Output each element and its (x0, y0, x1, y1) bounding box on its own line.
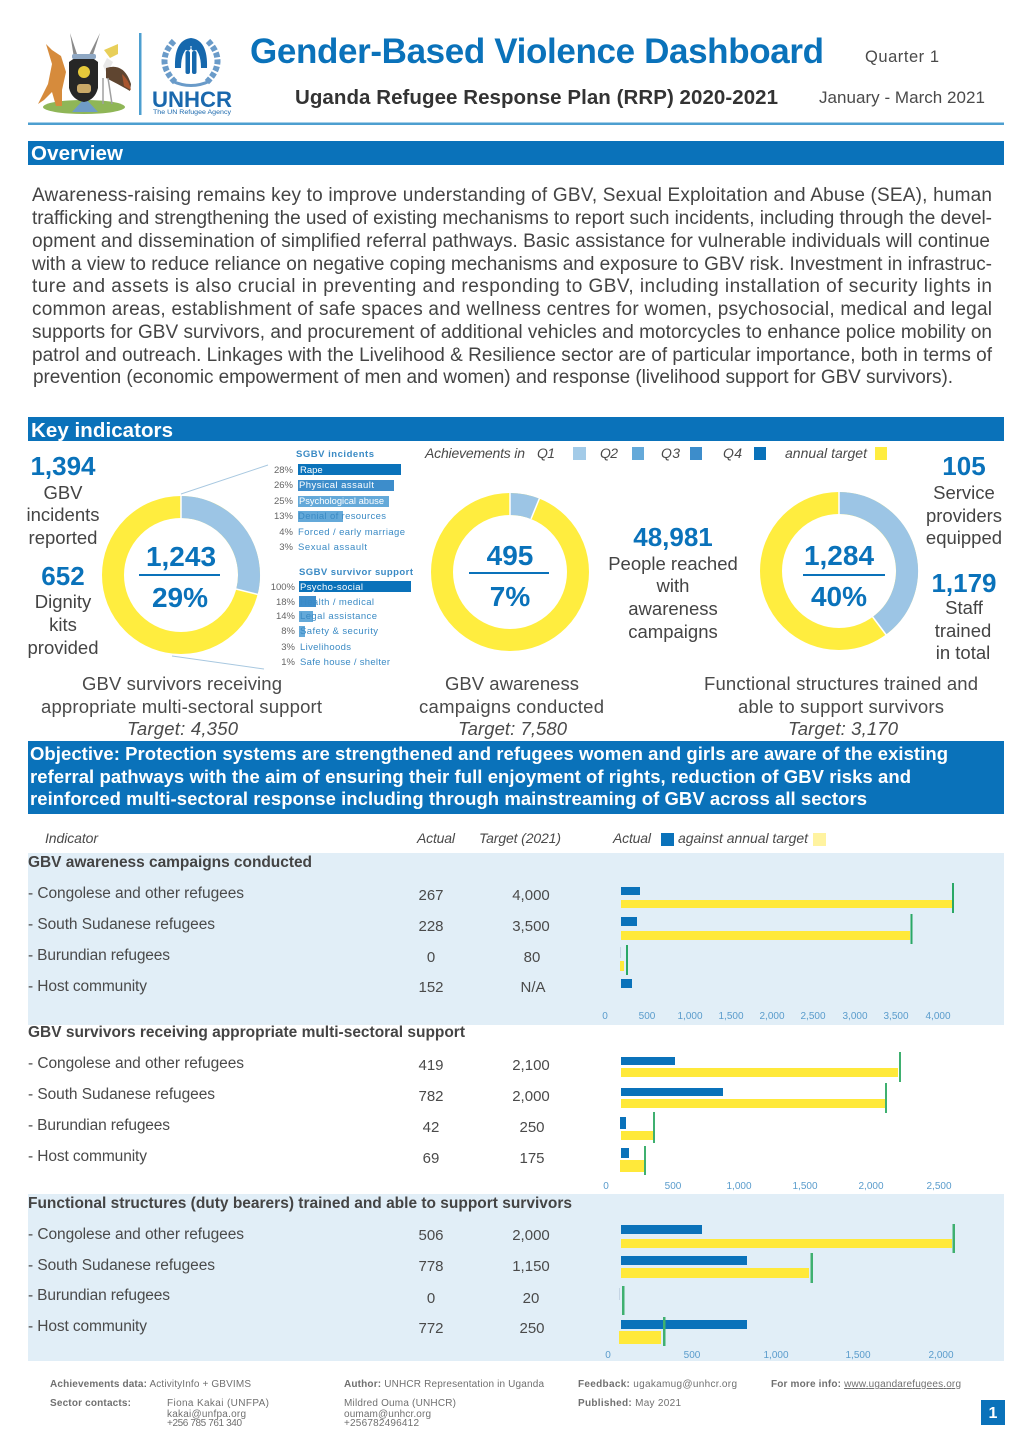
title: Gender-Based Violence Dashboard (250, 32, 824, 71)
panel: key indicators (26, 417, 1004, 739)
footer: author: Author: UNHCR Representation in Uganda (344, 1379, 544, 1390)
bar chart: SGBV incidents: 25% (274, 496, 294, 507)
footer: published: Published: May 2021 (578, 1398, 681, 1409)
bar chart: SGBV incidents: Rape (300, 465, 323, 476)
table header: Target (2021) (479, 830, 561, 846)
stat: staff trained: in total (936, 642, 990, 663)
donut chart: awareness campaigns: 495 (487, 540, 533, 571)
bar chart: SGBV incidents: 4% (279, 527, 294, 538)
footer: more info: For more info: www.ugandarefugees.org (771, 1379, 961, 1390)
stat: dignity kits provided: provided (28, 637, 98, 658)
caption: GBV survivors: appropriate multi-sectoral support (41, 696, 322, 717)
footer: contact UNFPA: kakai@unfpa.org (167, 1409, 246, 1420)
bar chart: SGBV incidents: SGBV incidents (296, 449, 374, 460)
table rows: 80 (524, 949, 540, 966)
footer: contact UNHCR: +256782496412 (344, 1418, 419, 1429)
table header (45, 830, 826, 846)
bar chart: SGBV incidents: Psychological abuse (299, 496, 384, 507)
table rows (28, 1055, 550, 1167)
table header: Actual (416, 830, 456, 846)
bar chart: survivors support: 500 (665, 1181, 682, 1192)
table rows: - Burundian refugees (28, 947, 170, 964)
overview heading: Overview (31, 142, 123, 165)
overview text: ture and assets is also crucial in preventing and responding to GBV, including installation of security lights in (32, 276, 992, 297)
table rows: - Burundian refugees (28, 1287, 170, 1304)
objective banner: reinforced multi-sectoral response including through mainstreaming of GBV across all sectors (30, 788, 867, 809)
legend: achievements by quarter (424, 445, 887, 461)
bar chart: SGBV incidents: 28% (274, 465, 294, 476)
stat: GBV incidents reported: reported (29, 527, 97, 548)
table rows: 0 (427, 1290, 435, 1307)
table rows: 250 (519, 1119, 545, 1136)
stat: people reached: with (656, 575, 689, 596)
bar chart: awareness campaigns: 2,000 (759, 1011, 785, 1022)
table rows: 772 (418, 1320, 444, 1337)
bar chart: awareness campaigns: 3,000 (842, 1011, 868, 1022)
table rows (28, 1226, 550, 1337)
table rows: - South Sudanese refugees (28, 1257, 215, 1274)
logo divider (139, 33, 142, 115)
legend: achievements by quarter: Achievements in (424, 445, 525, 461)
table rows (28, 885, 550, 996)
legend: achievements by quarter: annual target (785, 445, 868, 461)
table rows: - Host community (28, 1318, 147, 1335)
caption: functional structures: Functional structures trained and (704, 673, 978, 694)
table rows: - Congolese and other refugees (28, 1226, 244, 1243)
footer: contact UNHCR: oumam@unhcr.org (344, 1409, 431, 1420)
bar chart: SGBV survivor support: Legal assistance (300, 611, 377, 622)
panel: functional structures table: Functional structures (duty bearers) trained and able to support survivors (28, 1195, 572, 1212)
table rows: - South Sudanese refugees (28, 1086, 215, 1103)
overview heading (28, 141, 1004, 165)
table rows: - South Sudanese refugees (28, 916, 215, 933)
page number: 1 (989, 1405, 998, 1422)
stat: GBV incidents reported: GBV (43, 482, 83, 503)
table rows: - Burundian refugees (28, 1117, 170, 1134)
table rows: 175 (519, 1150, 545, 1167)
overview text: with a view to reduce reliance on negative coping mechanisms and exposure to GBV risk. Investment in infrastruc- (31, 254, 992, 275)
overview text: opment and dissemination of simplified referral pathways. Basic assistance for vulnerable individuals will continue (32, 231, 990, 252)
overview text (31, 185, 993, 388)
stat: GBV incidents reported (26, 451, 100, 548)
caption: awareness campaigns: Target: 7,580 (458, 718, 568, 739)
bar chart: functional structures: 1,000 (763, 1350, 789, 1361)
icon: UNHCR logo: The UN Refugee Agency (153, 110, 231, 116)
bar chart: awareness campaigns: 500 (639, 1011, 656, 1022)
bar chart: awareness campaigns: 3,500 (883, 1011, 909, 1022)
bar chart: SGBV survivor support: 100% (271, 582, 296, 593)
panel: overview (28, 141, 1004, 388)
key indicators heading: Key indicators (31, 419, 173, 442)
bar chart: survivors support (603, 1052, 952, 1192)
donut chart: GBV survivors: 1,243 (146, 541, 216, 572)
table rows: 0 (427, 949, 435, 966)
bar chart: SGBV incidents: 13% (274, 511, 294, 522)
panel: functional structures table (28, 1194, 1004, 1361)
table rows: 152 (418, 979, 444, 996)
panel: survivors support table (28, 1024, 952, 1192)
table rows: 506 (418, 1227, 444, 1244)
table rows: 419 (418, 1057, 444, 1074)
table rows: 2,000 (512, 1088, 550, 1105)
stat: people reached (608, 522, 738, 642)
bar chart: functional structures: 0 (605, 1350, 611, 1361)
footer: contact UNFPA: Fiona Kakai (UNFPA) (167, 1398, 269, 1409)
bar chart: SGBV survivor support: Psycho-social (300, 582, 363, 593)
stat: staff trained (931, 568, 997, 663)
bar chart: functional structures: 500 (684, 1350, 701, 1361)
bar chart: awareness campaigns: 1,500 (718, 1011, 744, 1022)
table rows: 2,100 (512, 1057, 550, 1074)
bar chart: SGBV survivor support: 8% (281, 626, 296, 637)
overview text: trafficking and strengthening the used of existing mechanisms to report such incidents, including through the devel- (32, 208, 992, 229)
table header: Actual (612, 830, 652, 846)
stat: service providers equipped: Service (933, 482, 995, 503)
table rows: - Host community (28, 978, 147, 995)
bar chart: awareness campaigns: 4,000 (925, 1011, 951, 1022)
stat: dignity kits provided (28, 561, 98, 658)
bar chart: survivors support: 2,000 (858, 1181, 884, 1192)
icon: UNHCR logo (152, 38, 232, 116)
stat: people reached: 48,981 (633, 522, 713, 552)
footer: contact UNFPA: +256 785 761 340 (167, 1418, 242, 1429)
donut chart: functional structures (771, 491, 907, 639)
stat: dignity kits provided: Dignity (35, 591, 92, 612)
stat: staff trained: trained (935, 620, 991, 641)
table rows: 20 (523, 1290, 539, 1307)
stat: service providers equipped: 105 (942, 451, 986, 481)
overview text: prevention (economic empowerment of men and women) and response (livelihood support for GBV survivors). (33, 367, 953, 388)
footer: contact UNHCR: Mildred Ouma (UNHCR) (344, 1398, 456, 1409)
icon: UNHCR logo: UNHCR (152, 87, 232, 112)
bar chart: SGBV survivor support: 18% (276, 597, 296, 608)
donut chart: GBV survivors: 29% (152, 582, 208, 613)
objective banner (28, 741, 1004, 814)
table rows: 782 (418, 1088, 444, 1105)
table rows: 69 (423, 1150, 439, 1167)
caption: functional structures (704, 673, 978, 739)
bar chart: SGBV survivor support: Safety & security (300, 626, 378, 637)
footer: data source: Achievements data: ActivityInfo + GBVIMS (50, 1379, 251, 1390)
bar chart: SGBV survivor support: SGBV survivor support (299, 567, 414, 578)
overview text: common areas, establishment of safe spaces and wellness centres for women, psychosocial, medical and legal (32, 299, 992, 320)
overview text: patrol and outreach. Linkages with the Livelihood & Resilience sector are of particular importance, both in terms of (32, 345, 993, 366)
stat: staff trained: Staff (945, 597, 984, 618)
stat: dignity kits provided: kits (49, 614, 77, 635)
bar chart: survivors support: 1,500 (792, 1181, 818, 1192)
panel: awareness campaigns table: GBV awareness campaigns conducted (28, 854, 312, 871)
icon: Uganda coat of arms (38, 33, 131, 114)
table rows: 3,500 (512, 918, 550, 935)
stat: people reached: campaigns (628, 621, 718, 642)
page number (981, 1400, 1005, 1425)
bar chart: SGBV survivor support (271, 567, 414, 668)
donut chart: awareness campaigns (442, 492, 578, 640)
bar chart: SGBV incidents: Physical assault (299, 480, 374, 491)
legend: achievements by quarter: Q3 (661, 445, 680, 461)
caption: GBV survivors: Target: 4,350 (127, 718, 239, 739)
caption: functional structures: able to support survivors (738, 696, 944, 717)
subtitle: Uganda Refugee Response Plan (RRP) 2020-2021 (295, 86, 778, 109)
bar chart: survivors support: 0 (603, 1181, 609, 1192)
footer: contact UNFPA (167, 1398, 269, 1429)
bar chart: awareness campaigns: 0 (602, 1011, 608, 1022)
bar chart: SGBV incidents: Denial of resources (298, 511, 386, 522)
donut chart: GBV survivors (113, 495, 260, 643)
legend: achievements by quarter: Q4 (723, 445, 742, 461)
bar chart: SGBV survivor support: 1% (281, 657, 296, 668)
table header: against annual target (678, 830, 809, 846)
table rows: - Congolese and other refugees (28, 1055, 244, 1072)
connector lines (172, 465, 268, 669)
bar chart: SGBV incidents: 3% (279, 542, 294, 553)
overview text: supports for GBV survivors, and procurement of additional vehicles and motorcycles to enhance police mobility on (32, 322, 992, 343)
stat: people reached: awareness (628, 598, 718, 619)
bar chart: SGBV survivor support: 3% (281, 642, 296, 653)
panel: survivors support table: GBV survivors receiving appropriate multi-sectoral support (28, 1024, 465, 1041)
table rows: 2,000 (512, 1227, 550, 1244)
stat: service providers equipped: equipped (926, 527, 1002, 548)
footer (50, 1379, 961, 1429)
legend: achievements by quarter: Q2 (600, 445, 618, 461)
bar chart: functional structures: 2,000 (928, 1350, 954, 1361)
stat: service providers equipped: providers (926, 505, 1002, 526)
bar chart: SGBV survivor support: Health / medical (300, 597, 374, 608)
bar chart: functional structures: 1,500 (845, 1350, 871, 1361)
objective banner: referral pathways with the aim of ensuring their full enjoyment of rights, reduction of GBV risks and (30, 766, 911, 787)
bar chart: awareness campaigns: 1,000 (677, 1011, 703, 1022)
table rows: 778 (418, 1258, 444, 1275)
table rows: - Host community (28, 1148, 147, 1165)
donut chart: functional structures: 1,284 (804, 540, 874, 571)
stat: service providers equipped (926, 451, 1002, 548)
caption: functional structures: Target: 3,170 (788, 718, 899, 739)
bar chart: SGBV survivor support: Livelihoods (300, 642, 351, 653)
donut chart: awareness campaigns: 7% (490, 581, 530, 612)
bar chart: awareness campaigns: 2,500 (800, 1011, 826, 1022)
legend: achievements by quarter: Q1 (537, 445, 555, 461)
caption: awareness campaigns (419, 673, 604, 739)
key indicators heading (28, 417, 1004, 442)
table rows: 4,000 (512, 887, 550, 904)
bar chart: survivors support: 2,500 (926, 1181, 952, 1192)
footer: feedback: Feedback: ugakamug@unhcr.org (578, 1379, 737, 1390)
stat: staff trained: 1,179 (931, 568, 997, 598)
bar chart: SGBV incidents: Sexual assault (298, 542, 367, 553)
bar chart: awareness campaigns (602, 883, 954, 1022)
bar chart: SGBV incidents: Forced / early marriage (298, 527, 405, 538)
table rows: 42 (423, 1119, 439, 1136)
table rows: 267 (418, 887, 444, 904)
bar chart: SGBV survivor support: Safe house / shelter (300, 657, 390, 668)
overview text: Awareness-raising remains key to improve understanding of GBV, Sexual Exploitation and Abuse (SEA), human (32, 185, 992, 206)
caption: GBV survivors (41, 673, 322, 739)
caption: awareness campaigns: GBV awareness (445, 673, 579, 694)
table rows: 228 (418, 918, 444, 935)
bar chart: functional structures (605, 1224, 955, 1361)
stat: dignity kits provided: 652 (41, 561, 85, 591)
table rows: 250 (519, 1320, 545, 1337)
bar chart: SGBV survivor support: 14% (276, 611, 296, 622)
footer: contact UNHCR (344, 1398, 456, 1429)
panel: awareness campaigns table (28, 853, 1004, 1025)
stat: GBV incidents reported: incidents (26, 504, 100, 525)
bar chart: survivors support: 1,000 (726, 1181, 752, 1192)
quarter: Quarter 1 (865, 48, 939, 66)
stat: people reached: People reached (608, 553, 738, 574)
caption: awareness campaigns: campaigns conducted (419, 696, 604, 717)
header (28, 32, 1004, 125)
caption: GBV survivors: GBV survivors receiving (82, 673, 282, 694)
donut chart: functional structures: 40% (811, 581, 867, 612)
bar chart: SGBV incidents (274, 449, 405, 553)
period: January - March 2021 (819, 88, 985, 107)
objective banner: Objective: Protection systems are strengthened and refugees women and girls are aware of the existing (30, 743, 948, 764)
table header: Indicator (45, 830, 99, 846)
bar chart: SGBV incidents: 26% (274, 480, 294, 491)
stat: GBV incidents reported: 1,394 (30, 451, 96, 481)
table rows: N/A (520, 979, 546, 996)
footer: sector contacts label: Sector contacts: (50, 1398, 131, 1409)
table rows: - Congolese and other refugees (28, 885, 244, 902)
table rows: 1,150 (512, 1258, 550, 1275)
